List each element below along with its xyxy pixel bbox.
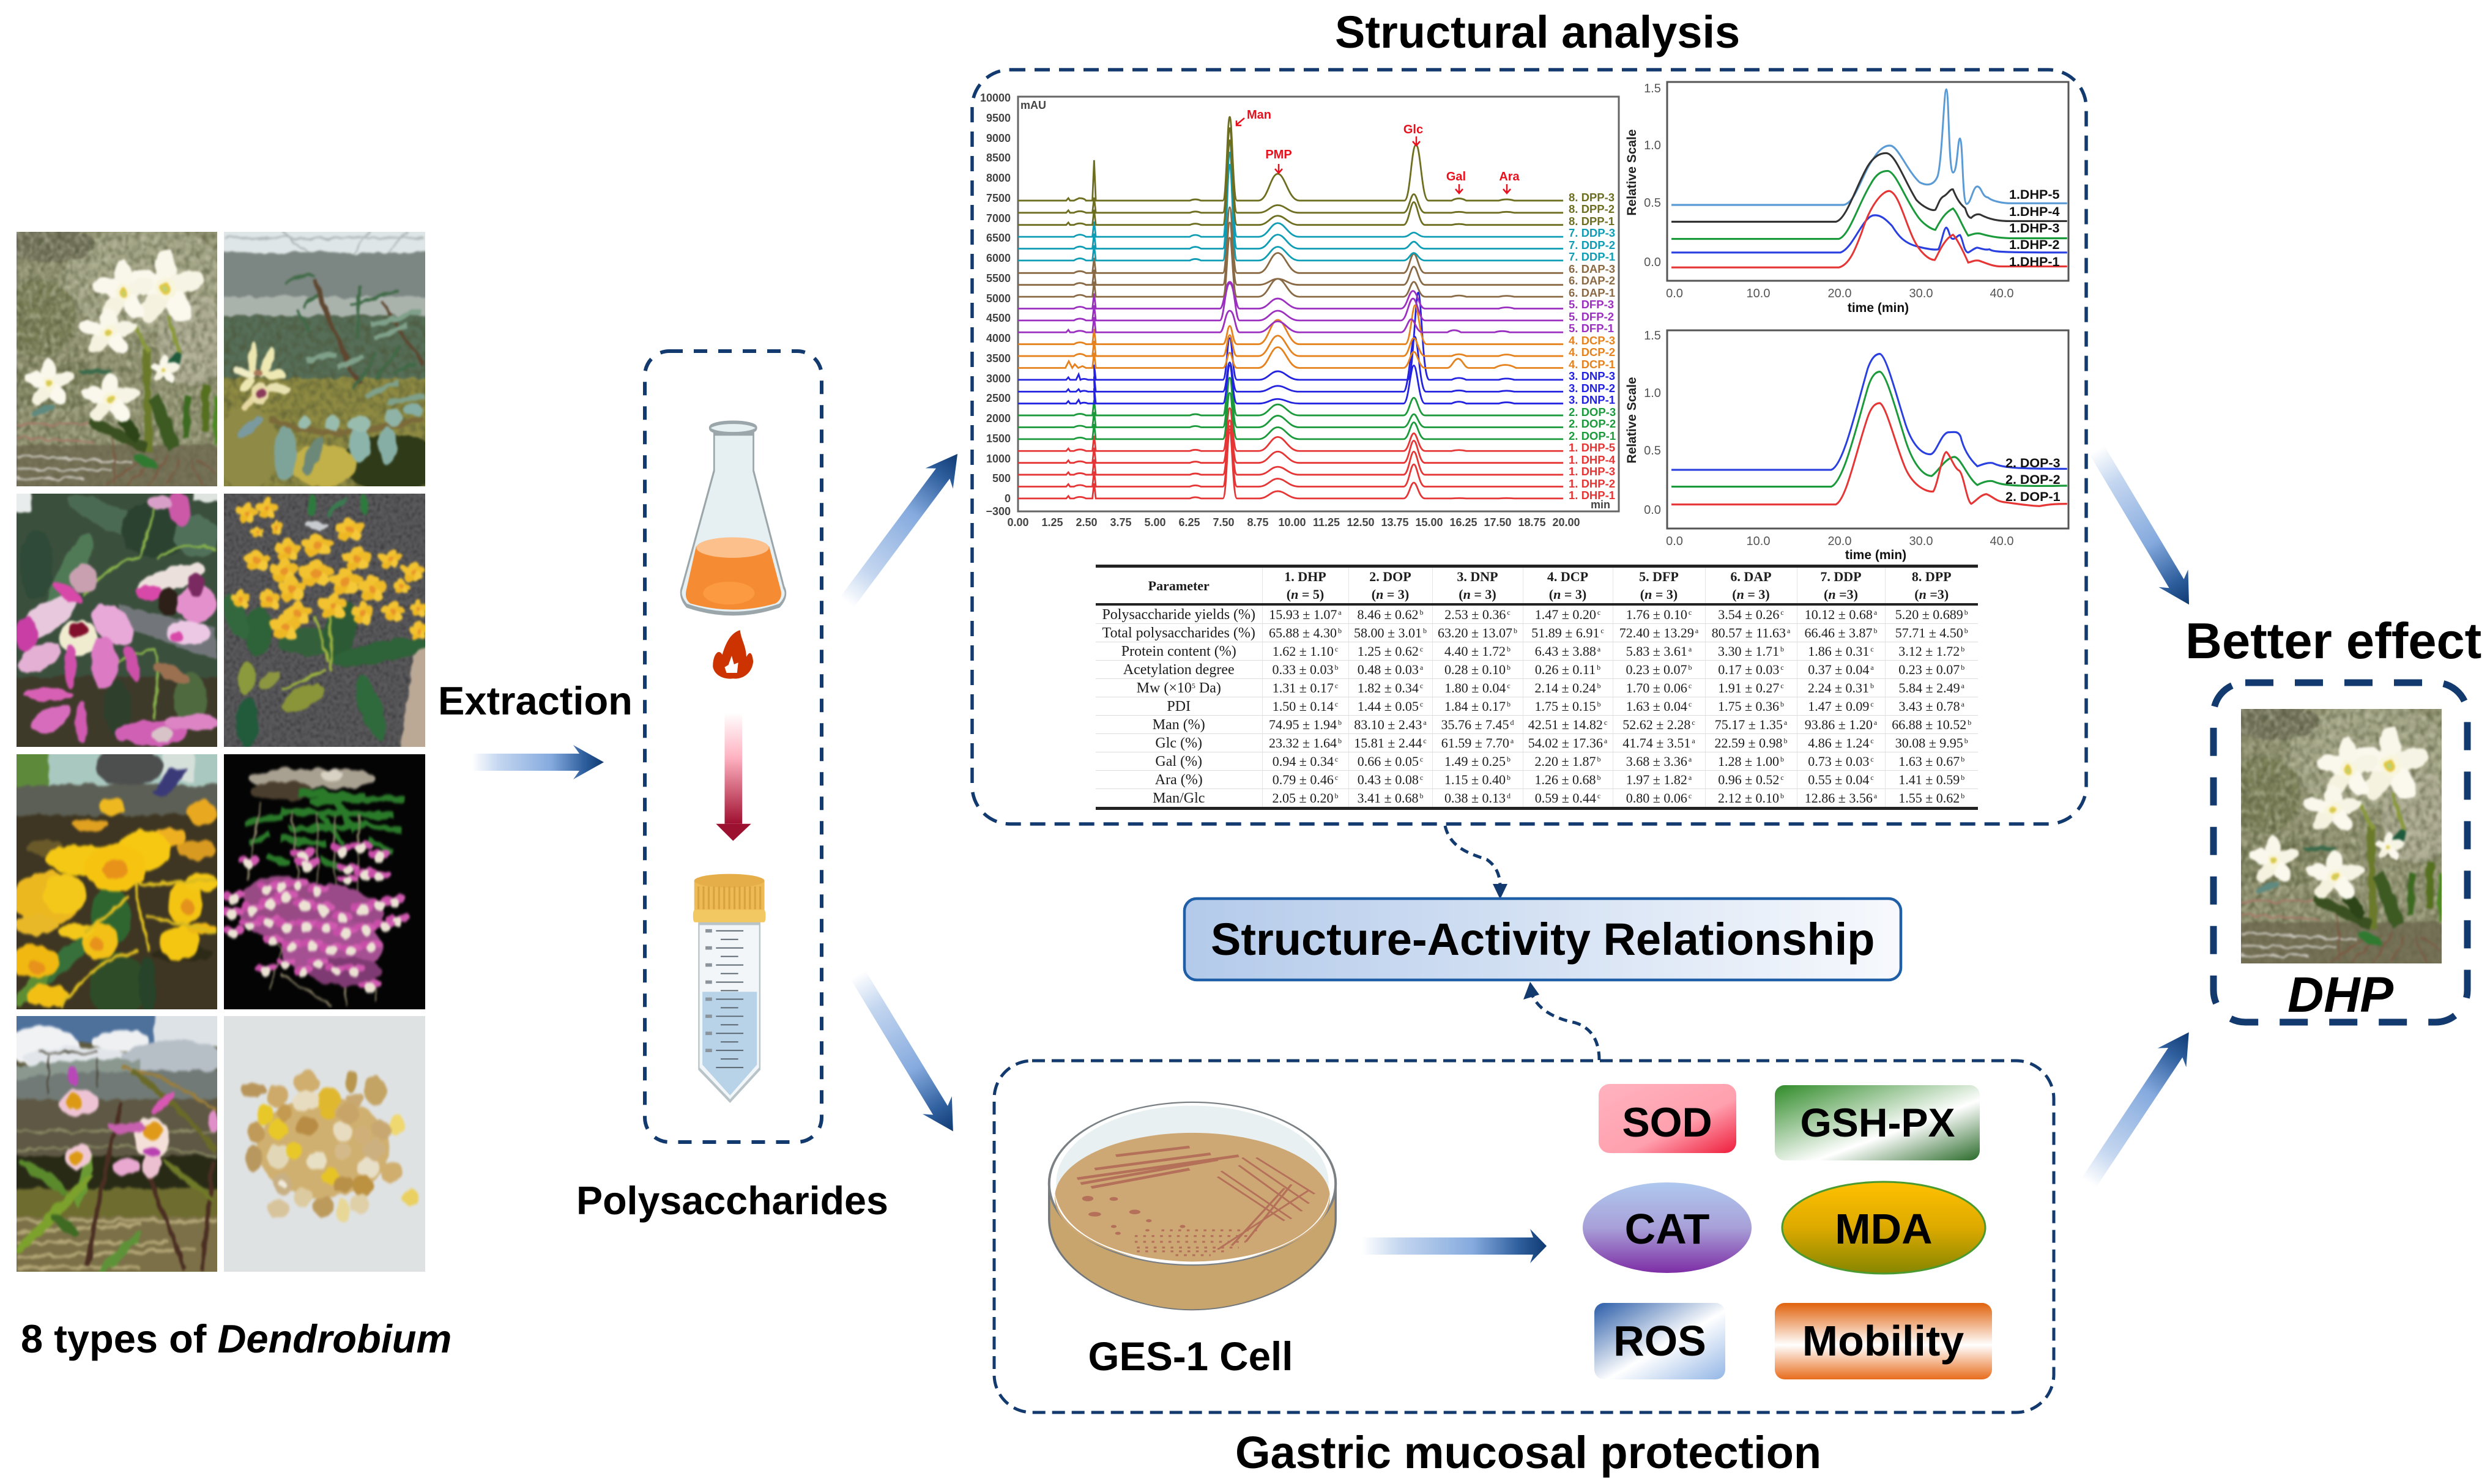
table: polysaccharide parameters: 1.63 ± 0.04c xyxy=(1626,699,1692,713)
trace legend labels: 7. DDP-2 xyxy=(1569,239,1615,251)
x axis tick labels: 5.00 xyxy=(1144,516,1166,529)
photo: bright yellow orchid xyxy=(17,754,217,1009)
table: polysaccharide parameters: 5.20 ± 0.689b xyxy=(1895,607,1968,621)
trace legend labels: 6. DAP-3 xyxy=(1569,262,1615,275)
x ticks xyxy=(1666,287,2013,300)
table: polysaccharide parameters: Parameter xyxy=(1148,577,1210,593)
trace legend labels: 3. DNP-3 xyxy=(1569,369,1615,382)
y axis tick labels xyxy=(980,92,1011,518)
peak annotations: Man xyxy=(1247,108,1271,122)
y ticks xyxy=(1644,329,1661,517)
y ticks xyxy=(1644,82,1661,269)
table: polysaccharide parameters: 0.73 ± 0.03c xyxy=(1808,754,1874,768)
trace legend labels xyxy=(1569,191,1616,502)
trace labels: 2. DOP-3 xyxy=(2005,456,2061,470)
table: polysaccharide parameters: 93.86 ± 1.20a xyxy=(1805,717,1877,732)
trace legend labels: 8. DPP-1 xyxy=(1569,215,1615,228)
x axis tick labels: 3.75 xyxy=(1110,516,1132,529)
arrow: pink heat arrow xyxy=(716,713,751,841)
badge: SOD xyxy=(1599,1084,1736,1153)
axis title x: time (min) xyxy=(1848,301,1909,315)
axis title y: Relative Scale xyxy=(1625,377,1639,464)
table: polysaccharide parameters: 1.70 ± 0.06c xyxy=(1626,680,1692,695)
DHP traces xyxy=(1671,89,2067,267)
chart: HPLC chromatograms xyxy=(980,92,1619,529)
x axis tick labels: 18.75 xyxy=(1518,516,1546,529)
y axis tick labels: 8500 xyxy=(986,152,1011,164)
y axis tick labels: 1000 xyxy=(986,453,1011,465)
icon: flame xyxy=(713,630,753,679)
x axis tick labels: 6.25 xyxy=(1178,516,1200,529)
table: polysaccharide parameters: 2.20 ± 1.87b xyxy=(1534,754,1601,768)
y axis tick labels: 7000 xyxy=(986,212,1011,224)
table: polysaccharide parameters: (n =3) xyxy=(1824,587,1858,602)
table: polysaccharide parameters: (n = 3) xyxy=(1549,587,1586,602)
badge: GSH-PX: GSH-PX xyxy=(1800,1100,1955,1145)
y axis tick labels: 2000 xyxy=(986,412,1011,425)
panel: structural analysis dashed box xyxy=(972,70,2086,824)
y axis tick labels: 3000 xyxy=(986,373,1011,385)
x ticks: 40.0 xyxy=(1990,287,2013,300)
table: polysaccharide parameters: 41.74 ± 3.51a xyxy=(1622,735,1695,750)
table: polysaccharide parameters: 0.79 ± 0.46c xyxy=(1273,772,1338,787)
arrow: dashed structural to SAR xyxy=(1445,826,1507,899)
trace legend labels: 5. DFP-3 xyxy=(1569,298,1614,311)
table: polysaccharide parameters: Acetylation degree xyxy=(1123,662,1235,678)
badge: MDA: MDA xyxy=(1835,1205,1933,1253)
label: Polysaccharides: Polysaccharides xyxy=(576,1179,888,1223)
badge: ROS: ROS xyxy=(1613,1317,1706,1365)
table: polysaccharide parameters: 2.53 ± 0.36c xyxy=(1444,607,1511,621)
table: polysaccharide parameters: 0.94 ± 0.34c xyxy=(1273,754,1338,768)
table: polysaccharide parameters: Man/Glc xyxy=(1153,790,1205,806)
x axis tick labels: 15.00 xyxy=(1415,516,1443,529)
trace legend labels: 7. DDP-3 xyxy=(1569,226,1615,239)
table: polysaccharide parameters: Glc (%) xyxy=(1155,735,1202,751)
table: polysaccharide parameters: 1. DHP xyxy=(1284,569,1326,584)
table: polysaccharide parameters: 22.59 ± 0.98b xyxy=(1714,735,1788,750)
trace labels: 2. DOP-2 xyxy=(2005,472,2061,487)
table: polysaccharide parameters: 1.26 ± 0.68b xyxy=(1534,772,1601,787)
table: polysaccharide parameters: 3. DNP xyxy=(1457,569,1498,584)
table: polysaccharide parameters: 54.02 ± 17.36a xyxy=(1528,735,1607,750)
y axis tick labels: 500 xyxy=(992,472,1011,484)
y axis tick labels: 6500 xyxy=(986,232,1011,244)
x axis tick labels xyxy=(1007,516,1580,529)
table: polysaccharide parameters: 0.55 ± 0.04c xyxy=(1808,772,1874,787)
panel: polysaccharides dashed box xyxy=(645,351,822,1142)
table: polysaccharide parameters: Gal (%) xyxy=(1155,754,1202,770)
trace legend labels: 8. DPP-3 xyxy=(1569,191,1615,204)
trace labels: 1.DHP-3 xyxy=(2009,221,2059,236)
table: polysaccharide parameters: 80.57 ± 11.63a xyxy=(1712,625,1790,640)
x axis tick labels: 10.00 xyxy=(1278,516,1306,529)
peak annotations xyxy=(1236,108,1520,193)
table: polysaccharide parameters: 0.66 ± 0.05c xyxy=(1358,754,1423,768)
table: polysaccharide parameters: 0.43 ± 0.08c xyxy=(1358,772,1423,787)
y axis tick labels: 9500 xyxy=(986,112,1011,124)
badge: CAT xyxy=(1583,1182,1752,1273)
table: polysaccharide parameters: 51.89 ± 6.91c xyxy=(1531,625,1604,640)
arrow: structural to better effect xyxy=(2082,441,2204,614)
y axis tick labels: 10000 xyxy=(980,92,1011,104)
table: polysaccharide parameters: 83.10 ± 2.43a xyxy=(1354,717,1427,732)
trace legend labels: 1. DHP-4 xyxy=(1569,453,1616,466)
table: polysaccharide parameters: 7. DDP xyxy=(1820,569,1862,584)
table: polysaccharide parameters: (n = 5) xyxy=(1287,587,1324,602)
table: polysaccharide parameters: 1.91 ± 0.27c xyxy=(1718,680,1784,695)
heading: 8 types of Dendrobium: 8 types of Dendrobium xyxy=(21,1316,452,1361)
table: polysaccharide parameters: 2.14 ± 0.24b xyxy=(1534,680,1601,695)
table: polysaccharide parameters: (n = 3) xyxy=(1372,587,1409,602)
y ticks: 1.0 xyxy=(1644,387,1661,400)
table: polysaccharide parameters: 0.37 ± 0.04a xyxy=(1808,662,1874,677)
table: polysaccharide parameters: (n = 3) xyxy=(1732,587,1770,602)
photo: dried stem slices xyxy=(224,1016,425,1272)
photo: pale flower with teal leaves xyxy=(224,232,425,486)
table: polysaccharide parameters: 2.12 ± 0.10b xyxy=(1718,790,1784,805)
table: polysaccharide parameters: 1.84 ± 0.17b xyxy=(1444,699,1511,713)
x ticks: 40.0 xyxy=(1990,535,2013,548)
y ticks: 1.5 xyxy=(1644,329,1661,343)
x axis tick labels: 2.50 xyxy=(1076,516,1098,529)
trace legend labels: 6. DAP-2 xyxy=(1569,274,1615,287)
table: polysaccharide parameters: 10.12 ± 0.68a xyxy=(1805,607,1877,621)
trace legend labels: 5. DFP-1 xyxy=(1569,322,1614,335)
table: polysaccharide parameters: 75.17 ± 1.35a xyxy=(1715,717,1787,732)
trace legend labels: 8. DPP-2 xyxy=(1569,202,1615,215)
axis title x: time (min) xyxy=(1845,548,1906,562)
table: polysaccharide parameters: 1.31 ± 0.17c xyxy=(1273,680,1338,695)
table: polysaccharide parameters: 1.62 ± 1.10c xyxy=(1273,644,1338,658)
x axis tick labels: 8.75 xyxy=(1247,516,1269,529)
table: polysaccharide parameters: 5.83 ± 3.61a xyxy=(1626,644,1692,658)
chart frame xyxy=(1018,97,1619,511)
y axis tick labels: 0 xyxy=(1005,492,1011,505)
label: DHP: DHP xyxy=(2287,967,2393,1023)
table: polysaccharide parameters: 1.80 ± 0.04c xyxy=(1444,680,1511,695)
x ticks: 20.0 xyxy=(1828,287,1851,300)
x axis tick labels: 16.25 xyxy=(1449,516,1477,529)
x axis tick labels: 7.50 xyxy=(1213,516,1235,529)
box: Structure-Activity Relationship xyxy=(1184,899,1901,980)
table: polysaccharide parameters: 1.75 ± 0.36b xyxy=(1718,699,1784,713)
table: polysaccharide parameters: 1.15 ± 0.40b xyxy=(1444,772,1511,787)
panel: gastric mucosal protection dashed box xyxy=(994,1061,2054,1412)
table: polysaccharide parameters: 61.59 ± 7.70a xyxy=(1441,735,1514,750)
icon: flask xyxy=(681,422,786,614)
panel: Dendrobium photo grid xyxy=(3,220,447,1283)
table: polysaccharide parameters: 0.26 ± 0.11b xyxy=(1535,662,1600,677)
x ticks: 0.0 xyxy=(1666,535,1683,548)
peak annotations: Gal xyxy=(1446,170,1466,184)
heading: Gastric mucosal protection: Gastric mucosal protection xyxy=(1235,1427,1821,1478)
table: polysaccharide parameters: 0.80 ± 0.06c xyxy=(1626,790,1692,805)
table: polysaccharide parameters: 6. DAP xyxy=(1730,569,1772,584)
x ticks: 30.0 xyxy=(1909,535,1933,548)
y ticks: 0.5 xyxy=(1644,444,1661,458)
table: polysaccharide parameters: 0.33 ± 0.03b xyxy=(1272,662,1339,677)
icon: centrifuge tube xyxy=(693,874,765,1101)
x axis tick labels: 1.25 xyxy=(1041,516,1063,529)
table: polysaccharide parameters: 58.00 ± 3.01b xyxy=(1354,625,1427,640)
y ticks: 0.0 xyxy=(1644,503,1661,517)
y axis tick labels: 1500 xyxy=(986,432,1011,445)
trace legend labels: 3. DNP-2 xyxy=(1569,382,1615,395)
table: polysaccharide parameters: 1.75 ± 0.15b xyxy=(1534,699,1601,713)
y axis tick labels: 9000 xyxy=(986,132,1011,144)
label: GES-1 Cell: GES-1 Cell xyxy=(1088,1334,1293,1379)
badge: MDA xyxy=(1782,1182,1985,1274)
table: polysaccharide parameters: 0.38 ± 0.13d xyxy=(1444,790,1511,805)
y axis tick labels: 6000 xyxy=(986,252,1011,264)
table: polysaccharide parameters: 5. DFP xyxy=(1639,569,1679,584)
table: polysaccharide parameters: 2. DOP xyxy=(1369,569,1411,584)
table: polysaccharide parameters: 1.41 ± 0.59b xyxy=(1898,772,1964,787)
table: polysaccharide parameters: 8. DPP xyxy=(1912,569,1952,584)
box: Structure-Activity Relationship: Structure-Activity Relationship xyxy=(1211,914,1875,965)
chart: SEC curves DHP xyxy=(1625,82,2068,315)
table: polysaccharide parameters: 63.20 ± 13.07b xyxy=(1438,625,1517,640)
trace legend labels: 1. DHP-5 xyxy=(1569,441,1615,454)
trace labels: 1.DHP-5 xyxy=(2009,187,2059,202)
table: polysaccharide parameters: Ara (%) xyxy=(1155,772,1203,788)
x ticks: 20.0 xyxy=(1828,535,1851,548)
table: polysaccharide parameters: PDI xyxy=(1167,699,1191,714)
label: Extraction: Extraction xyxy=(438,678,633,723)
table: polysaccharide parameters: 2.05 ± 0.20b xyxy=(1272,790,1339,805)
y axis tick labels: 3500 xyxy=(986,352,1011,365)
table: polysaccharide parameters: (n = 3) xyxy=(1640,587,1678,602)
x ticks: 0.0 xyxy=(1666,287,1683,300)
y axis tick labels: 4000 xyxy=(986,332,1011,344)
axis title y: Relative Scale xyxy=(1625,129,1639,216)
table: polysaccharide parameters: 4. DCP xyxy=(1547,569,1588,584)
table: polysaccharide parameters xyxy=(1096,565,1978,810)
trace legend labels: 5. DFP-2 xyxy=(1569,310,1614,323)
table: polysaccharide parameters: 0.23 ± 0.07b xyxy=(1626,662,1692,677)
x ticks xyxy=(1666,535,2013,548)
table: polysaccharide parameters: 0.17 ± 0.03c xyxy=(1718,662,1784,677)
table: polysaccharide parameters: 1.49 ± 0.25b xyxy=(1444,754,1511,768)
table: polysaccharide parameters: 8.46 ± 0.62b xyxy=(1357,607,1424,621)
arrow: dashed gastric to SAR xyxy=(1523,982,1599,1060)
y axis tick labels: −300 xyxy=(986,505,1011,518)
trace legend labels: 1. DHP-2 xyxy=(1569,477,1615,490)
trace legend labels: 4. DCP-3 xyxy=(1569,334,1615,347)
icon: petri dish xyxy=(1049,1102,1336,1310)
x axis tick labels: 13.75 xyxy=(1381,516,1409,529)
y axis tick labels: 4500 xyxy=(986,312,1011,324)
arrow: gastric to better effect xyxy=(2075,1023,2203,1192)
x ticks: 30.0 xyxy=(1909,287,1933,300)
trace labels: 1.DHP-1 xyxy=(2009,254,2059,269)
axis units: mAU xyxy=(1020,99,1046,111)
trace legend labels: 4. DCP-1 xyxy=(1569,358,1615,371)
table: polysaccharide parameters: Protein content (%) xyxy=(1121,644,1236,659)
chart frame xyxy=(1667,330,2068,529)
table: polysaccharide parameters: 3.68 ± 3.36a xyxy=(1626,754,1692,768)
table: polysaccharide parameters: (n =3) xyxy=(1914,587,1949,602)
arrow: extraction xyxy=(472,745,604,779)
table: polysaccharide parameters: 1.44 ± 0.05c xyxy=(1358,699,1423,713)
table: polysaccharide parameters: 1.97 ± 1.82a xyxy=(1626,772,1692,787)
arrow: to structural analysis xyxy=(833,443,972,613)
peak annotations: Ara xyxy=(1499,170,1520,184)
table: polysaccharide parameters: 3.12 ± 1.72b xyxy=(1898,644,1964,658)
trace legend labels: 2. DOP-3 xyxy=(1569,406,1616,418)
badge: Mobility: Mobility xyxy=(1802,1317,1964,1365)
x axis tick labels: 17.50 xyxy=(1484,516,1512,529)
table: polysaccharide parameters: 0.28 ± 0.10b xyxy=(1444,662,1511,677)
table: polysaccharide parameters: 3.43 ± 0.78a xyxy=(1899,699,1964,713)
table: polysaccharide parameters: 1.82 ± 0.34c xyxy=(1358,680,1423,695)
table: polysaccharide parameters: 15.93 ± 1.07a xyxy=(1269,607,1342,621)
x ticks: 10.0 xyxy=(1747,535,1770,548)
photo: pink hanging orchid on black xyxy=(224,754,425,1009)
y ticks: 1.5 xyxy=(1644,82,1661,95)
table: polysaccharide parameters: 1.55 ± 0.62b xyxy=(1898,790,1964,805)
table: polysaccharide parameters: 30.08 ± 9.95b xyxy=(1895,735,1968,750)
table: polysaccharide parameters: 1.63 ± 0.67b xyxy=(1898,754,1964,768)
badge: GSH-PX xyxy=(1775,1085,1980,1160)
table: polysaccharide parameters: Polysaccharide yields (%) xyxy=(1102,607,1255,623)
x axis tick labels: 0.00 xyxy=(1007,516,1029,529)
axis units xyxy=(1020,99,1610,511)
y ticks: 1.0 xyxy=(1644,139,1661,152)
photo: white Dendrobium xyxy=(3,220,230,497)
table: polysaccharide parameters: 35.76 ± 7.45d xyxy=(1441,717,1514,732)
heading: Better effect: Better effect xyxy=(2185,612,2481,669)
trace labels xyxy=(2005,456,2061,504)
trace legend labels: 1. DHP-3 xyxy=(1569,465,1615,478)
badge: Mobility xyxy=(1775,1303,1992,1379)
table: polysaccharide parameters: 2.24 ± 0.31b xyxy=(1808,680,1874,695)
trace legend labels: 2. DOP-2 xyxy=(1569,417,1616,430)
table: polysaccharide parameters: 1.25 ± 0.62c xyxy=(1358,644,1423,658)
table: polysaccharide parameters: 0.48 ± 0.03a xyxy=(1358,662,1423,677)
table: polysaccharide parameters: Man (%) xyxy=(1153,717,1205,733)
table: polysaccharide parameters: 66.88 ± 10.52b xyxy=(1892,717,1971,732)
table: polysaccharide parameters: 1.86 ± 0.31c xyxy=(1808,644,1874,658)
chromatogram traces xyxy=(1018,117,1563,499)
y axis tick labels: 5500 xyxy=(986,272,1011,284)
table: polysaccharide parameters: Mw (×105 Da) xyxy=(1137,680,1221,696)
axis units: min xyxy=(1591,499,1610,511)
table: polysaccharide parameters: 1.50 ± 0.14c xyxy=(1273,699,1338,713)
panel: DHP dashed box xyxy=(2213,683,2467,1022)
badge: ROS xyxy=(1594,1303,1725,1379)
y axis tick labels: 7500 xyxy=(986,192,1011,204)
y axis tick labels: 2500 xyxy=(986,392,1011,404)
table: polysaccharide parameters: 52.62 ± 2.28c xyxy=(1622,717,1695,732)
trace legend labels: 6. DAP-1 xyxy=(1569,286,1615,299)
badge: CAT: CAT xyxy=(1625,1205,1709,1253)
arrow: cell to markers xyxy=(1362,1229,1547,1263)
heading: Structural analysis: Structural analysis xyxy=(1335,7,1740,58)
table: polysaccharide parameters: 1.76 ± 0.10c xyxy=(1626,607,1692,621)
table: polysaccharide parameters: 3.41 ± 0.68b xyxy=(1357,790,1424,805)
table: polysaccharide parameters: 23.32 ± 1.64b xyxy=(1269,735,1342,750)
table: polysaccharide parameters: 1.47 ± 0.09c xyxy=(1808,699,1874,713)
x axis tick labels: 20.00 xyxy=(1552,516,1580,529)
trace labels: 1.DHP-4 xyxy=(2009,204,2059,219)
table: polysaccharide parameters: 74.95 ± 1.94b xyxy=(1269,717,1342,732)
x axis tick labels: 12.50 xyxy=(1347,516,1375,529)
table: polysaccharide parameters: (n = 3) xyxy=(1459,587,1496,602)
table: polysaccharide parameters: 65.88 ± 4.30b xyxy=(1269,625,1342,640)
table: polysaccharide parameters: 0.23 ± 0.07b xyxy=(1898,662,1964,677)
polysaccharide preparation illustration xyxy=(681,422,786,1101)
trace legend labels: 7. DDP-1 xyxy=(1569,250,1615,263)
table: polysaccharide parameters: 72.40 ± 13.29a xyxy=(1619,625,1698,640)
trace legend labels: 1. DHP-1 xyxy=(1569,489,1615,502)
photo: yellow orchid over pebbles xyxy=(224,494,425,747)
table: polysaccharide parameters: 3.30 ± 1.71b xyxy=(1718,644,1784,658)
peak annotations: Glc xyxy=(1403,123,1423,136)
table: polysaccharide parameters: 1.28 ± 1.00b xyxy=(1718,754,1784,768)
trace legend labels: 4. DCP-2 xyxy=(1569,346,1615,358)
chart frame xyxy=(1667,82,2068,281)
table: polysaccharide parameters: 57.71 ± 4.50b xyxy=(1895,625,1968,640)
peak annotations: PMP xyxy=(1265,148,1292,161)
trace legend labels: 3. DNP-1 xyxy=(1569,393,1615,406)
arrow: to gastric protection xyxy=(843,965,968,1140)
table: polysaccharide parameters: 5.84 ± 2.49a xyxy=(1899,680,1964,695)
table: polysaccharide parameters: 42.51 ± 14.82c xyxy=(1528,717,1607,732)
photo: pink and white orchid xyxy=(17,494,217,747)
table: polysaccharide parameters: 0.59 ± 0.44c xyxy=(1535,790,1600,805)
x axis tick labels: 11.25 xyxy=(1313,516,1340,529)
y axis tick labels: 8000 xyxy=(986,172,1011,184)
photo: pink orchid under netting xyxy=(17,1016,217,1272)
y ticks: 0.5 xyxy=(1644,196,1661,210)
y axis tick labels: 5000 xyxy=(986,292,1011,305)
table: polysaccharide parameters: 15.81 ± 2.44c xyxy=(1354,735,1427,750)
table: polysaccharide parameters: 6.43 ± 3.88a xyxy=(1535,644,1600,658)
table: polysaccharide parameters: 3.54 ± 0.26c xyxy=(1718,607,1784,621)
table: polysaccharide parameters: 4.86 ± 1.24c xyxy=(1808,735,1874,750)
table: polysaccharide parameters: Total polysaccharides (%) xyxy=(1102,625,1255,641)
table: polysaccharide parameters: 12.86 ± 3.56a xyxy=(1805,790,1877,805)
photo: DHP xyxy=(2228,697,2455,974)
trace legend labels: 2. DOP-1 xyxy=(1569,429,1616,442)
trace labels: 2. DOP-1 xyxy=(2005,489,2061,504)
y ticks: 0.0 xyxy=(1644,256,1661,269)
badge: SOD: SOD xyxy=(1622,1099,1712,1146)
table: polysaccharide parameters: 0.96 ± 0.52c xyxy=(1718,772,1784,787)
DOP traces xyxy=(1671,354,2067,506)
table: polysaccharide parameters: 4.40 ± 1.72b xyxy=(1444,644,1511,658)
x ticks: 10.0 xyxy=(1747,287,1770,300)
chart: SEC curves DOP xyxy=(1625,329,2068,562)
trace labels xyxy=(2009,187,2059,269)
table: polysaccharide parameters: 66.46 ± 3.87b xyxy=(1804,625,1878,640)
table: polysaccharide parameters: 1.47 ± 0.20c xyxy=(1535,607,1600,621)
trace labels: 1.DHP-2 xyxy=(2009,237,2059,252)
